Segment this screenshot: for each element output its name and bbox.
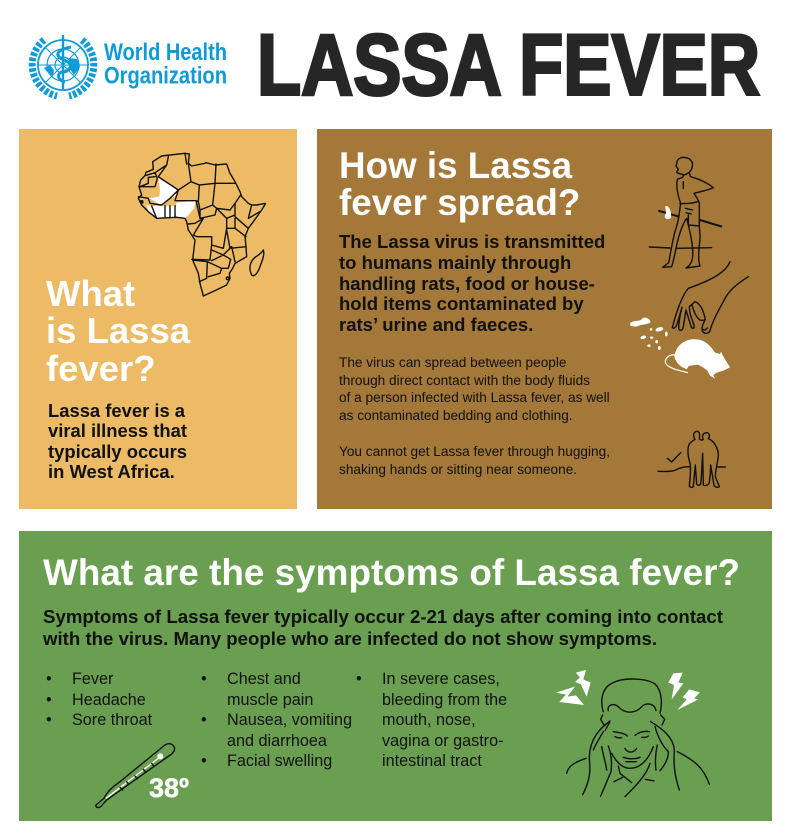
logo text	[104, 39, 227, 90]
panel: what is Lassa fever	[19, 129, 297, 509]
panel: how is Lassa fever spread	[317, 129, 772, 509]
heading: fever?	[46, 348, 156, 389]
heading: is Lassa	[46, 310, 191, 351]
symptom list: column 2: Facial swelling	[227, 752, 332, 770]
heading: What	[46, 273, 135, 314]
person to person text: of a person infected with Lassa fever, as well	[339, 390, 610, 405]
transmission text: The Lassa virus is transmitted	[339, 231, 605, 252]
intro text: with the virus. Many people who are infected do not show symptoms.	[42, 629, 657, 649]
description: viral illness that	[48, 420, 187, 441]
symptom list: column 3: vagina or gastro-	[382, 732, 503, 750]
description: typically occurs	[48, 441, 187, 462]
safe contact text: shaking hands or sitting near someone.	[339, 462, 577, 477]
symptom list: column 3: •	[356, 670, 362, 688]
description: in West Africa.	[48, 461, 175, 482]
heading: What are the symptoms of Lassa fever?	[43, 552, 740, 593]
symptom list: column 1: •	[46, 691, 52, 709]
symptom list: column 2: Nausea, vomiting	[227, 711, 352, 729]
symptom list: column 3: In severe cases,	[382, 670, 500, 688]
intro text: Symptoms of Lassa fever typically occur 2-21 days after coming into contact	[43, 607, 723, 627]
description: Lassa fever is a	[48, 400, 186, 421]
symptom list: column 3	[356, 670, 507, 770]
logo text: World Health	[104, 39, 227, 66]
symptom list: column 3: intestinal tract	[382, 752, 482, 770]
symptom list: column 1: Fever	[72, 670, 114, 688]
symptom list: column 1: •	[46, 670, 52, 688]
symptom list: column 2	[201, 670, 352, 770]
icon: two people embracing with tick	[658, 431, 725, 487]
intro text	[42, 607, 723, 649]
heading	[339, 145, 580, 223]
WHO logo	[32, 35, 227, 96]
map of Africa	[138, 153, 266, 296]
heading: How is Lassa	[339, 145, 573, 186]
person to person text: The virus can spread between people	[339, 355, 566, 370]
person to person text: as contaminated bedding and clothing.	[339, 408, 573, 423]
safe contact text	[339, 444, 610, 477]
icon: WHO emblem	[32, 35, 94, 96]
person to person text: through direct contact with the body fluids	[339, 373, 590, 388]
symptom list: column 2: Chest and	[227, 670, 301, 688]
symptom list: column 1	[46, 670, 153, 729]
transmission text: rats’ urine and faeces.	[339, 314, 533, 335]
symptom list: column 2: •	[201, 711, 207, 729]
transmission text: hold items contaminated by	[339, 293, 584, 314]
icon: hand with rat and droppings	[630, 262, 748, 379]
panel: symptoms	[19, 531, 772, 821]
safe contact text: You cannot get Lassa fever through hugging,	[339, 444, 610, 459]
heading	[46, 273, 191, 389]
icon: person holding object	[649, 157, 722, 268]
symptom list: column 2: muscle pain	[227, 691, 313, 709]
temperature label: 38º	[149, 773, 189, 803]
symptom list: column 3: bleeding from the	[382, 691, 507, 709]
transmission text	[339, 231, 605, 335]
logo text: Organization	[104, 62, 227, 90]
symptom list: column 1: Sore throat	[72, 711, 153, 729]
symptom list: column 2: •	[201, 670, 207, 688]
symptom list: column 1: Headache	[72, 691, 146, 709]
transmission text: handling rats, food or house-	[339, 273, 595, 294]
symptom list: column 2: and diarrhoea	[227, 732, 327, 750]
description	[48, 400, 187, 482]
icon: thermometer	[96, 744, 175, 807]
symptom list: column 2: •	[201, 752, 207, 770]
symptom list: column 3: mouth, nose,	[382, 711, 476, 729]
symptom list: column 1: •	[46, 711, 52, 729]
transmission text: to humans mainly through	[339, 252, 571, 273]
icon: man with headache	[556, 670, 709, 797]
heading: fever spread?	[339, 182, 580, 223]
person to person text	[339, 355, 610, 423]
